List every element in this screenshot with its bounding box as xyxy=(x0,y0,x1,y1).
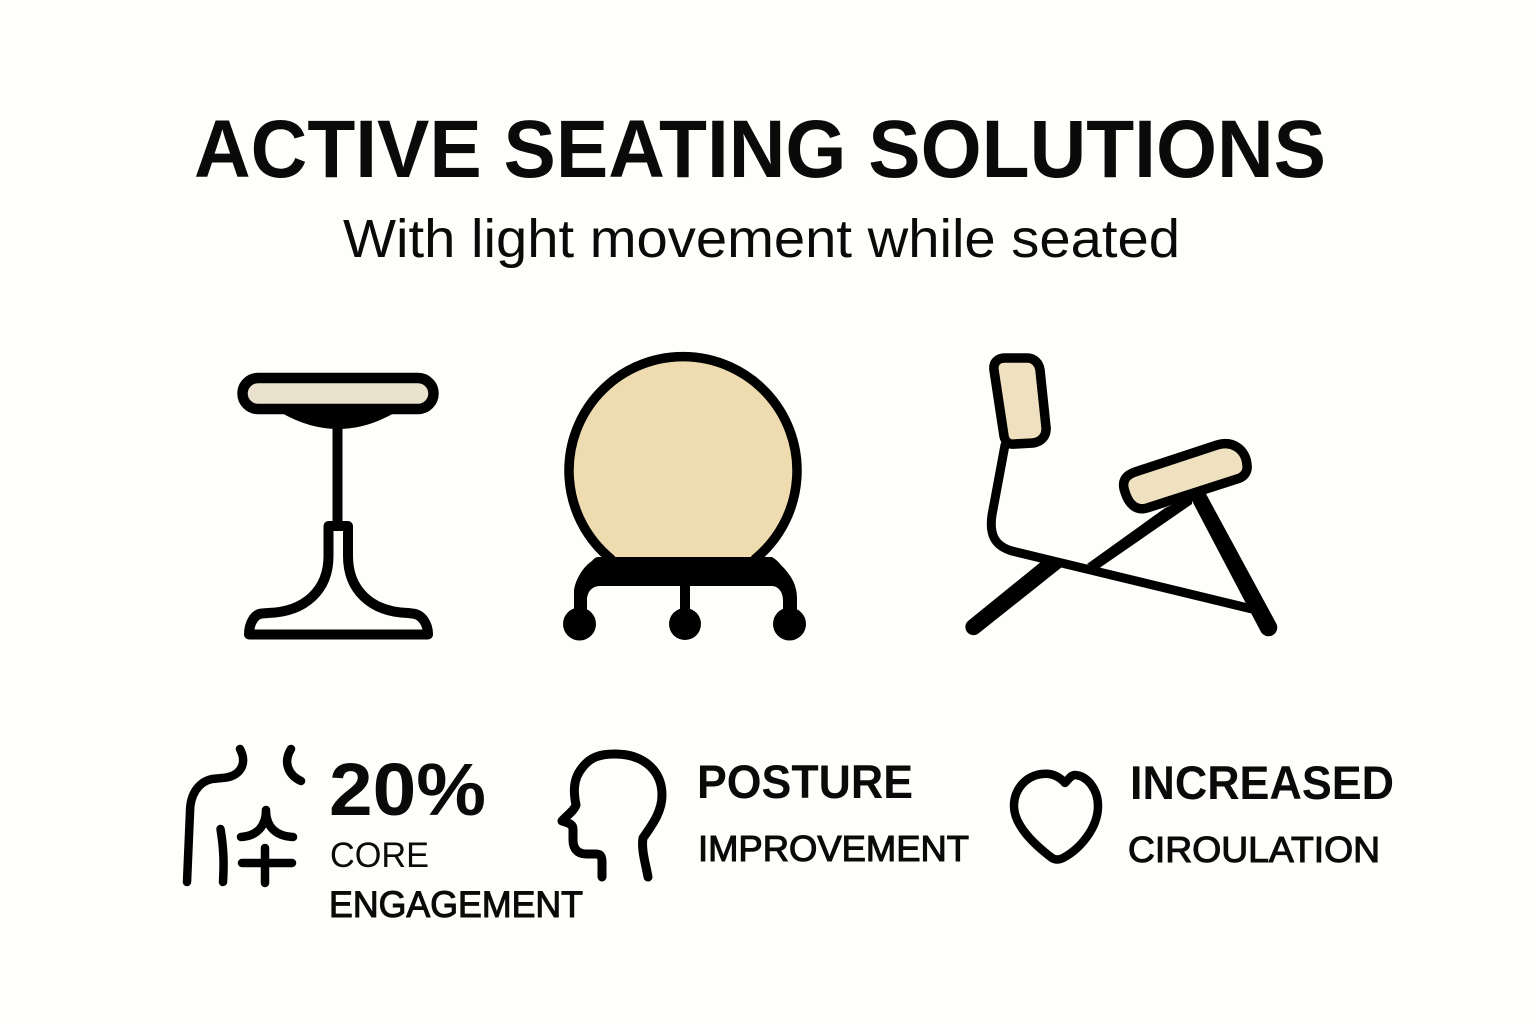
subtitle: With light movement while seated xyxy=(343,209,1180,269)
icon: ball chair xyxy=(563,355,806,640)
stat label line two: ENGAGEMENT xyxy=(329,884,583,925)
stat: core engagement xyxy=(187,748,583,925)
stat label line one: CORE xyxy=(330,836,429,875)
stat: increased circulation xyxy=(1014,756,1394,870)
stat value: 20% xyxy=(329,748,486,831)
icon: torso and core xyxy=(187,749,301,883)
posture label: IMPROVEMENT xyxy=(698,828,969,869)
circulation label: CIROULATION xyxy=(1128,829,1380,870)
circulation heading: INCREASED xyxy=(1130,756,1394,809)
stat: posture improvement xyxy=(562,754,969,877)
title: ACTIVE SEATING SOLUTIONS xyxy=(194,104,1326,195)
posture heading: POSTURE xyxy=(697,755,913,808)
icon: head profile xyxy=(562,754,662,877)
icon: heart xyxy=(1014,774,1098,860)
icon: stool xyxy=(242,378,434,634)
icon: kneeling chair xyxy=(965,358,1277,636)
